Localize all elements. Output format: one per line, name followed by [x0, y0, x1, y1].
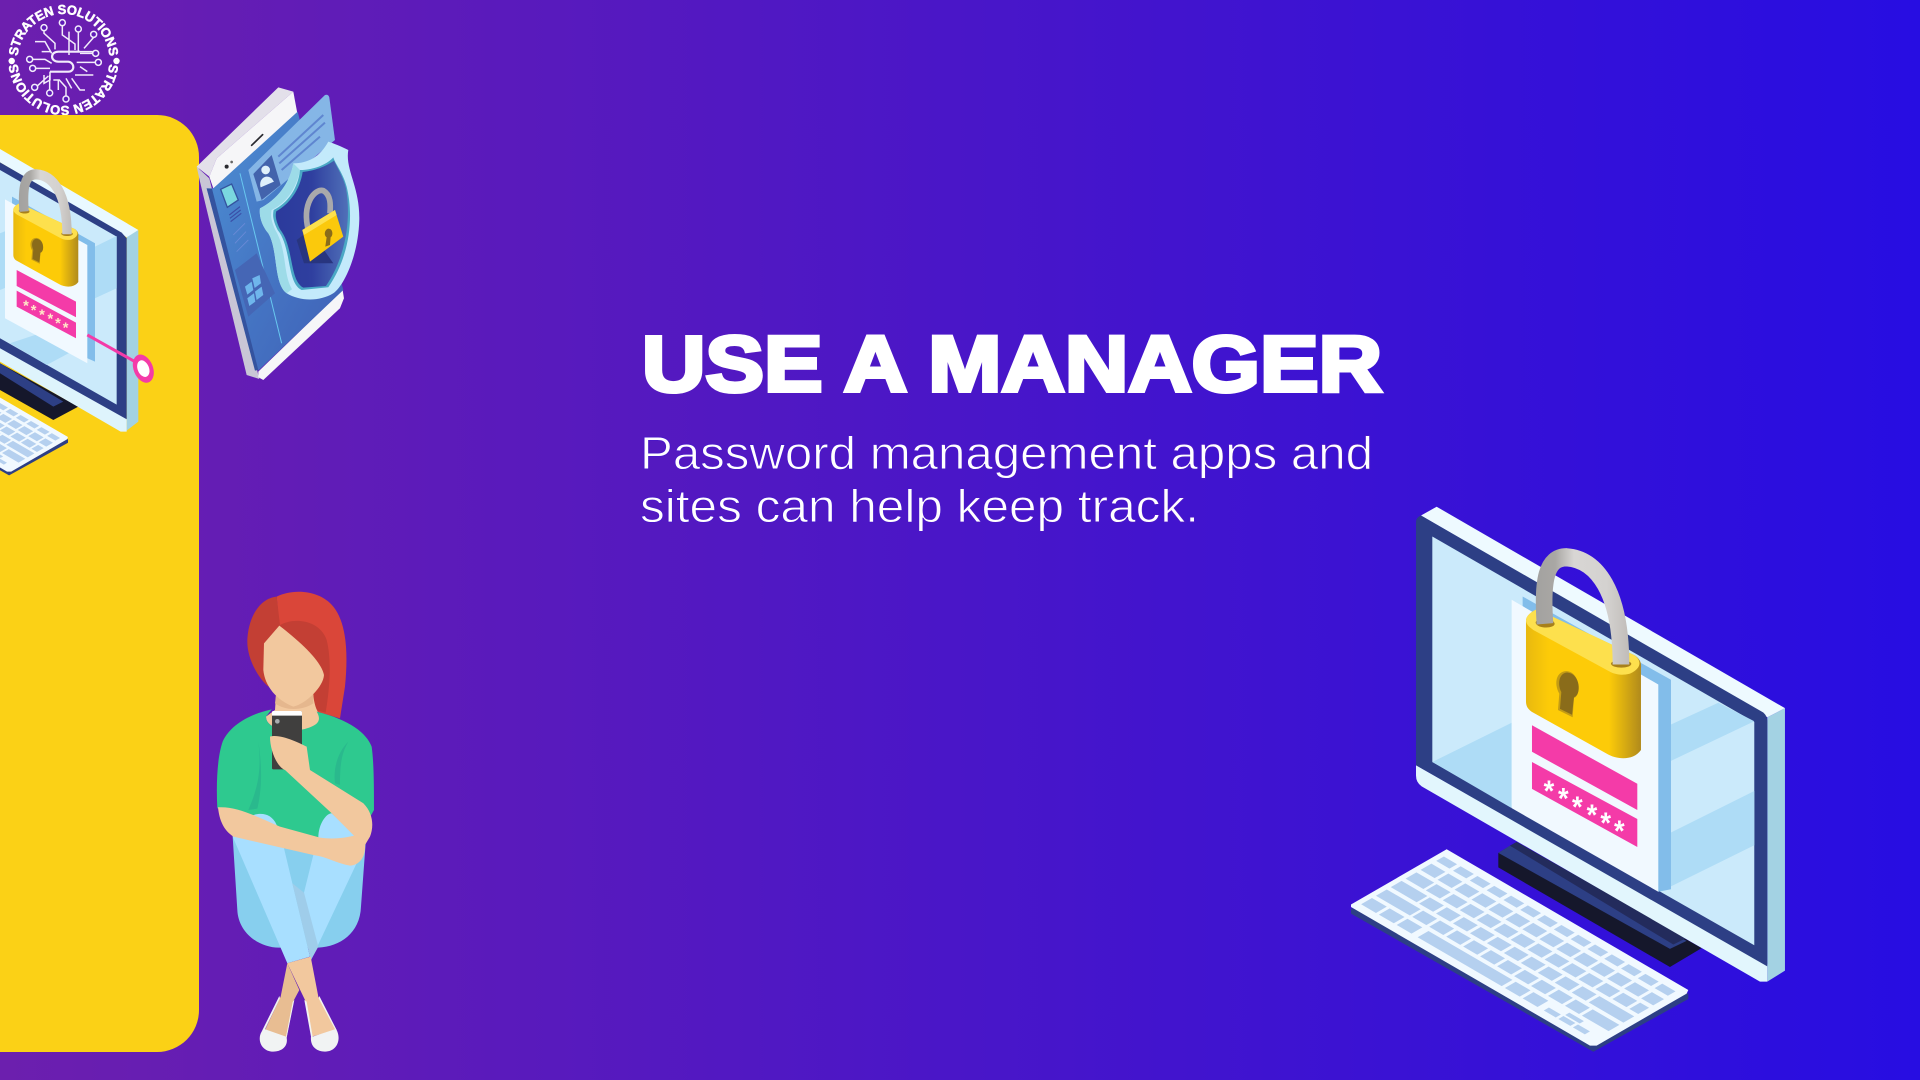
illustration: cropped monitor on yellow panel: [0, 149, 158, 432]
monitor bezel: [1416, 515, 1767, 966]
shield padlock: [302, 190, 343, 262]
shield side band: [260, 163, 300, 293]
password asterisks: *: [55, 316, 61, 332]
monitor screen: [1432, 537, 1754, 945]
document back sheet: [1523, 597, 1671, 892]
phone screen: [207, 112, 343, 371]
monitor side: [127, 230, 138, 431]
monitor side: [1767, 708, 1785, 982]
keyboard: [1351, 849, 1688, 1052]
app list lines: [229, 207, 241, 222]
monitor top strip: [1421, 507, 1785, 717]
neck shadow: [275, 693, 313, 709]
app grid tiles: [245, 275, 263, 306]
shield teal rim: [273, 157, 350, 290]
password asterisks: *: [23, 299, 29, 315]
password asterisks: *: [31, 303, 37, 319]
monitor chin: [0, 347, 127, 432]
left leg: [233, 814, 310, 963]
logo: Straten Solutions: [8, 4, 120, 115]
shield 3D back: [260, 142, 359, 300]
app teal tile: [221, 184, 238, 207]
password asterisks: *: [1600, 807, 1612, 841]
phone held: [272, 711, 302, 769]
padlock: [13, 174, 78, 287]
phone bottom white edge: [258, 290, 344, 380]
right shoe: [304, 996, 339, 1052]
monitor dark bezel: [0, 162, 127, 419]
body line 1: Password management apps and: [640, 427, 1373, 479]
logo ring dots: [8, 58, 120, 64]
title: USE A MANAGER: [642, 319, 1382, 408]
message bubble: [248, 95, 335, 202]
password field bars: [1532, 725, 1637, 847]
pants back: [233, 837, 366, 948]
leg overlap: [292, 883, 318, 961]
password asterisks: *: [39, 307, 45, 323]
password asterisks: [23, 299, 69, 336]
password asterisks: [1544, 775, 1625, 849]
monitor stand: [0, 363, 78, 420]
phone top gray edge: [197, 87, 293, 177]
shirt: [217, 709, 374, 893]
phone speaker and camera: [225, 135, 263, 169]
neck: [266, 695, 322, 731]
app grid card: [235, 253, 275, 317]
illustration: woman sitting with phone: [217, 592, 374, 1052]
phone side edge: [197, 167, 259, 379]
shield padlock shadow: [297, 230, 333, 263]
right leg: [304, 813, 366, 961]
bubble text lines: [278, 115, 325, 170]
screen divider line: [240, 173, 282, 343]
left shoe: [260, 996, 294, 1052]
padlock: [1526, 557, 1641, 758]
password asterisks: *: [1558, 782, 1569, 816]
body text: [640, 427, 1373, 532]
document sheet: [5, 199, 87, 363]
shirt folds: [248, 742, 348, 810]
hair dark left: [247, 597, 280, 687]
hair dark fringe: [279, 621, 330, 713]
password asterisks: *: [63, 320, 69, 336]
stand shadow: [1510, 842, 1687, 944]
password asterisks: *: [1587, 799, 1598, 833]
panel: yellow left block: [0, 115, 199, 1052]
illustration: phone with security shield: [197, 87, 359, 380]
illustration: desktop monitor with padlock: [1351, 507, 1785, 1052]
stand top: [1498, 846, 1687, 949]
monitor screen: [0, 170, 117, 405]
stand base: [1498, 842, 1702, 967]
password asterisks: *: [1544, 775, 1555, 809]
face: [263, 626, 324, 707]
logo circuit S mark: [27, 20, 101, 102]
front shin and foot: [287, 957, 337, 1037]
screen shading: [0, 227, 117, 365]
password asterisks: *: [1614, 815, 1625, 849]
hair back: [277, 592, 346, 718]
avatar card: [253, 155, 281, 200]
monitor chin: [1416, 765, 1767, 982]
screen shading: [1432, 703, 1754, 886]
password field bars: [17, 270, 76, 338]
lower arm: [218, 807, 365, 866]
rear shin and foot: [265, 963, 299, 1038]
body line 2: sites can help keep track.: [640, 480, 1199, 532]
password asterisks: *: [1572, 791, 1583, 824]
password asterisks: *: [47, 312, 53, 328]
document back sheet: [12, 197, 95, 362]
screen left stripe: [207, 188, 258, 371]
document sheet: [1512, 600, 1658, 892]
illustration: keyboard on yellow panel: [0, 350, 68, 475]
upper arm and hand: [270, 736, 372, 845]
logo ring text: STRATEN SOLUTIONS: [8, 4, 118, 56]
phone top white face: [209, 92, 298, 188]
avatar icon: [260, 166, 274, 187]
logo lower ring text: STRATEN SOLUTIONS: [8, 64, 118, 115]
pink pointer pin: [87, 335, 158, 386]
monitor top strip: [0, 149, 138, 237]
shield face: [276, 161, 348, 288]
